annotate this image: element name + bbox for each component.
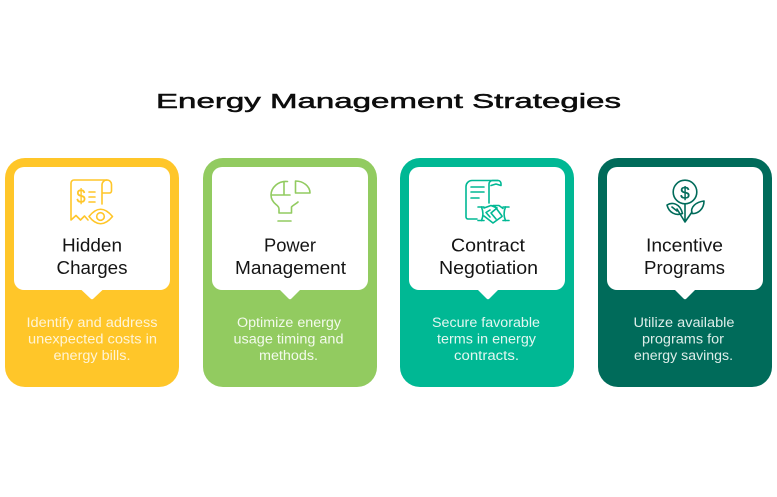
description: programs for: [642, 332, 725, 346]
icon: light bulb with pie: [271, 181, 310, 221]
white header box: [14, 167, 170, 299]
title: Energy Management Strategies: [156, 90, 621, 113]
icon: contract and handshake: [466, 180, 509, 223]
heading: [56, 236, 128, 278]
heading: Hidden: [62, 236, 122, 256]
description: Utilize available: [634, 315, 734, 330]
description: [26, 315, 158, 363]
heading: Contract: [451, 236, 525, 256]
panel: hidden charges: [5, 158, 179, 387]
description: unexpected costs in: [28, 332, 157, 346]
panel: power management: [203, 158, 377, 387]
white header box: [409, 167, 565, 299]
card background: [598, 158, 772, 387]
description: [432, 315, 540, 363]
heading: Incentive: [646, 236, 723, 256]
card background: [5, 158, 179, 387]
description: [234, 315, 344, 363]
heading: [644, 236, 725, 278]
card background: [203, 158, 377, 387]
white header box: [607, 167, 763, 299]
icon: receipt with eye: $: [76, 187, 86, 208]
card background: [400, 158, 574, 387]
description: energy bills.: [54, 348, 130, 363]
white header box: [212, 167, 368, 299]
heading: [439, 236, 538, 278]
heading: Power: [264, 236, 316, 256]
description: methods.: [259, 348, 318, 363]
description: [634, 315, 734, 363]
panel: contract negotiation: [400, 158, 574, 387]
panel: incentive programs: [598, 158, 772, 387]
description: Identify and address: [26, 315, 158, 330]
description: Secure favorable: [432, 315, 540, 330]
heading: Negotiation: [439, 258, 538, 278]
description: contracts.: [454, 348, 519, 363]
description: usage timing and: [234, 332, 344, 346]
description: terms in energy: [437, 332, 536, 346]
heading: Charges: [56, 258, 128, 278]
description: energy savings.: [634, 348, 733, 363]
icon: money plant: [667, 180, 704, 222]
icon: money plant: $: [680, 184, 690, 202]
heading: Management: [235, 258, 346, 278]
description: Optimize energy: [237, 315, 341, 330]
heading: [235, 236, 346, 278]
heading: Programs: [644, 258, 725, 278]
icon: receipt with eye: [71, 180, 112, 224]
